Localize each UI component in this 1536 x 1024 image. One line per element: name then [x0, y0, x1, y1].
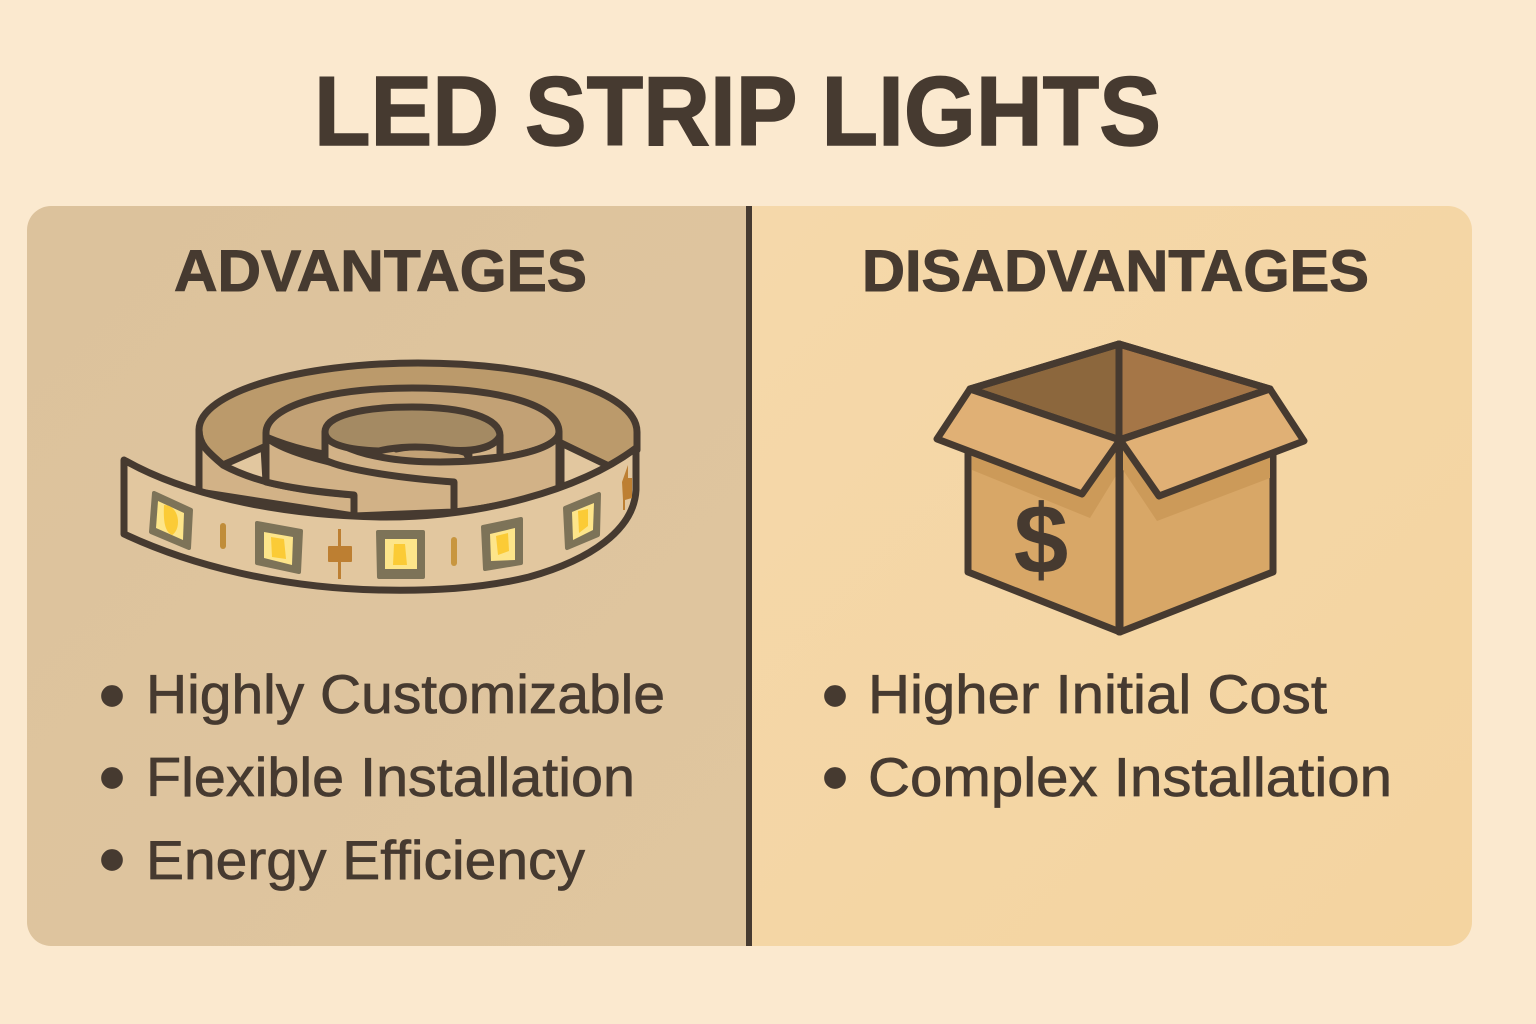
dollar sign: $: [1014, 484, 1068, 594]
disadvantages list: [824, 663, 1392, 808]
panel: advantages: [27, 206, 748, 946]
advantages list: Energy Efficiency: [146, 829, 586, 891]
LED chips: [151, 465, 632, 579]
icon: LED strip coil: [124, 363, 637, 590]
strip front band: [124, 448, 636, 590]
advantages list: [102, 663, 665, 891]
title: LED STRIP LIGHTS: [314, 56, 1161, 166]
icon: open cardboard box with dollar sign: [937, 344, 1304, 632]
heading: disadvantages: DISADVANTAGES: [862, 239, 1369, 304]
disadvantages list: Complex Installation: [868, 746, 1392, 808]
panel: disadvantages: [748, 206, 1472, 946]
heading: advantages: ADVANTAGES: [174, 239, 587, 304]
advantages list: Highly Customizable: [146, 663, 665, 725]
disadvantages list: Higher Initial Cost: [868, 663, 1327, 725]
advantages list: Flexible Installation: [146, 746, 635, 808]
